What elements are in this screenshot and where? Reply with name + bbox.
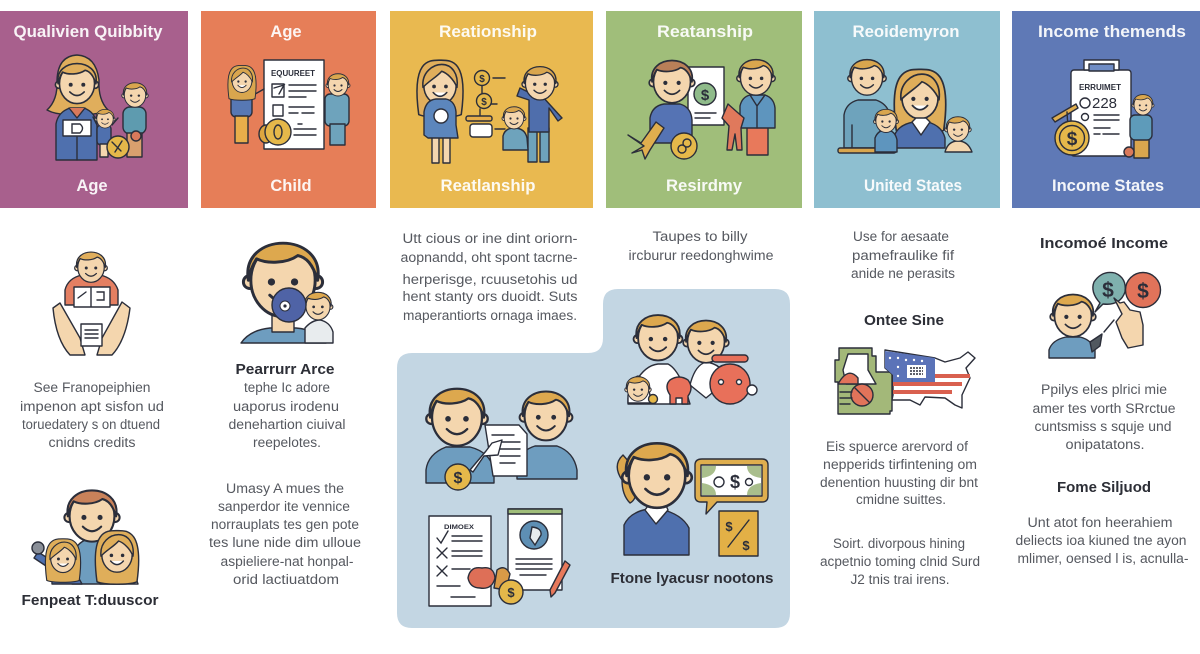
icon: checklist and report with coin and pencil: DIMOEX — [444, 524, 475, 531]
panel: united states — [814, 11, 1000, 208]
caption: card: Ftone lyacusr nootons — [610, 570, 774, 587]
icon: child with dollar bubbles and hand: $ — [1137, 280, 1149, 303]
panel: residency — [606, 11, 802, 208]
text block: residency details: J2 tnis trai irens. — [850, 572, 950, 587]
heading: panel 3 title: Reationship — [439, 23, 537, 41]
icon: income form, coin and child: $ — [1067, 129, 1078, 150]
text block: relationship description: aopnandd, oht spont tacrne- — [400, 250, 578, 265]
heading: panel 4 title: Reatanship — [657, 23, 753, 41]
text block: age details: orid lactiuatdom — [233, 572, 339, 587]
icon: income form, coin and child: 228 — [1092, 95, 1117, 112]
text block: age details: Umasy A mues the — [226, 481, 344, 496]
text block: income details: Unt atot fon heerahiem — [1028, 515, 1172, 530]
column 2: age — [209, 243, 361, 587]
text block: residency description: ircburur reedonghwime — [628, 248, 774, 263]
text block: residency description: Taupes to billy — [652, 229, 748, 244]
text block: age details: tes lune nide dim ulloue — [209, 535, 361, 550]
heading: column 5: Ontee Sine — [864, 312, 944, 329]
panel: age — [201, 11, 376, 208]
icon: child with blue disc — [241, 243, 333, 343]
heading: panel 2 title: Age — [270, 23, 302, 41]
icon: girl with banknote speech bubble: $ — [725, 519, 733, 534]
text block: age description: uaporus irodenu — [233, 399, 339, 414]
icon: family with piggy bank — [625, 315, 757, 404]
text block: residency rules: Eis spuerce arervord of — [826, 439, 968, 454]
icon: child with dollar bubbles and hand — [1049, 272, 1160, 358]
icon: parent with two children — [32, 490, 139, 584]
text block: age details: sanperdor ite vennice — [218, 499, 350, 514]
heading: panel 5 title: Reoidemyron — [852, 23, 960, 41]
icon: girl with banknote speech bubble: $ — [730, 472, 740, 492]
text block: intro: cnidns credits — [48, 435, 136, 450]
label: child: Child — [270, 177, 312, 195]
icon: request form with two people — [228, 60, 350, 149]
text block: residency rules: nepperids tirfintening om — [823, 457, 977, 472]
text block: age description — [228, 380, 346, 450]
text block: residency note: Use for aesaate — [853, 229, 949, 244]
text block: residency rules: cmidne suittes. — [856, 492, 946, 507]
text block: relationship description: herperisge, rcuusetohis ud — [402, 272, 578, 287]
icon: checklist and report with coin and pencil: $ — [507, 585, 515, 600]
text block: income note: Ppilys eles plrici mie — [1041, 382, 1167, 397]
panel: blue illustration card — [397, 289, 790, 628]
text block: age description: denehartion ciuival — [228, 417, 346, 432]
icon: family group — [838, 60, 972, 153]
text block: residency details: acpetnio toming clnid Surd — [820, 554, 980, 569]
icon: two men with document, toys and coin: $ — [701, 87, 710, 104]
heading: panel 1 title: Qualivien Quibbity — [14, 23, 163, 41]
label: united states: United States — [864, 177, 962, 195]
icon: girl with banknote speech bubble — [617, 443, 768, 556]
icon: folder and US flag map — [835, 348, 975, 414]
text block: residency rules: denention huusting dir bnt — [820, 475, 978, 490]
heading: panel 6 title: Income themends — [1038, 23, 1186, 41]
icon: two men with document, toys and coin — [628, 60, 775, 159]
text block: intro: toruedatery s on dtuend — [22, 417, 160, 432]
icon: family with coins and pot — [417, 60, 562, 163]
heading: income subsection: Fome Siljuod — [1057, 479, 1151, 496]
text block: income note: onipatatons. — [1066, 437, 1144, 452]
text block: relationship description: hent stanty ors duoidt. Suts — [402, 289, 578, 304]
column 6: income — [1016, 235, 1188, 566]
text block: residency details: Soirt. divorpous hining — [833, 536, 965, 551]
text block: residency details — [820, 536, 980, 587]
text block: relationship description: Utt cious or ine dint oriorn- — [402, 231, 578, 246]
text block: intro: impenon apt sisfon ud — [20, 399, 164, 414]
icon: two men with document and coin: $ — [454, 470, 463, 487]
column 5: united states — [820, 229, 980, 587]
heading: column 2: Pearrurr Arce — [236, 361, 334, 378]
icon: two men with document and coin — [426, 389, 577, 490]
text block: residency rules — [820, 439, 978, 507]
icon: child reading above open hands — [53, 252, 130, 355]
text block: residency note — [851, 229, 955, 281]
text block: income details: deliects ioa kiuned tne ayon — [1016, 533, 1186, 548]
label: age: Age — [76, 177, 108, 195]
panel: relationship — [390, 11, 593, 208]
text block: income details: mlimer, oensed l is, acnulla- — [1018, 551, 1188, 566]
icon: family with coins and pot: $ — [481, 97, 487, 108]
icon: child with dollar bubbles and hand: $ — [1102, 279, 1114, 302]
text block: residency note: pamefraulike fif — [852, 248, 954, 263]
column 1: qualifying overview — [20, 252, 164, 609]
text block: intro: See Franopeiphien — [34, 380, 150, 395]
text block: residency note: anide ne perasits — [851, 266, 955, 281]
heading: column 6: Incomoé Income — [1040, 235, 1168, 252]
text block: income note: amer tes vorth SRrctue — [1032, 401, 1176, 416]
text block: age details: aspieliere-nat honpal- — [220, 554, 354, 569]
icon: girl with banknote speech bubble: $ — [742, 538, 750, 553]
panel: qualifying child — [0, 11, 188, 208]
text block: age description: reepelotes. — [253, 435, 321, 450]
text block: residency description — [628, 229, 774, 263]
icon: family with coins and pot: $ — [479, 74, 485, 85]
text block: age description: tephe Ic adore — [244, 380, 330, 395]
text block: income note: cuntsmiss s squje und — [1034, 419, 1172, 434]
icon: income form, coin and child — [1052, 60, 1154, 158]
heading: column 1 caption: Fenpeat T:duuscor — [22, 592, 159, 609]
icon: income form, coin and child: ERRUIMET — [1079, 83, 1121, 92]
icon: request form with two people: EQUUREET — [271, 69, 315, 78]
label: relationship: Reatlanship — [440, 177, 536, 195]
label: income states: Income States — [1052, 177, 1164, 195]
text block: intro — [20, 380, 164, 450]
icon: checklist and report with coin and pencil — [429, 509, 570, 606]
text block: income details — [1016, 515, 1188, 566]
icon: woman with two children — [47, 55, 148, 160]
text block: relationship description — [400, 231, 578, 323]
text block: age details — [209, 481, 361, 587]
text block: relationship description: maperantiorts ornaga imaes. — [403, 308, 577, 323]
label: residency: Resirdmy — [666, 177, 743, 195]
text block: age details: norrauplats tes gen pote — [211, 517, 359, 532]
text block: income note — [1032, 382, 1176, 452]
panel: income — [1012, 11, 1200, 208]
